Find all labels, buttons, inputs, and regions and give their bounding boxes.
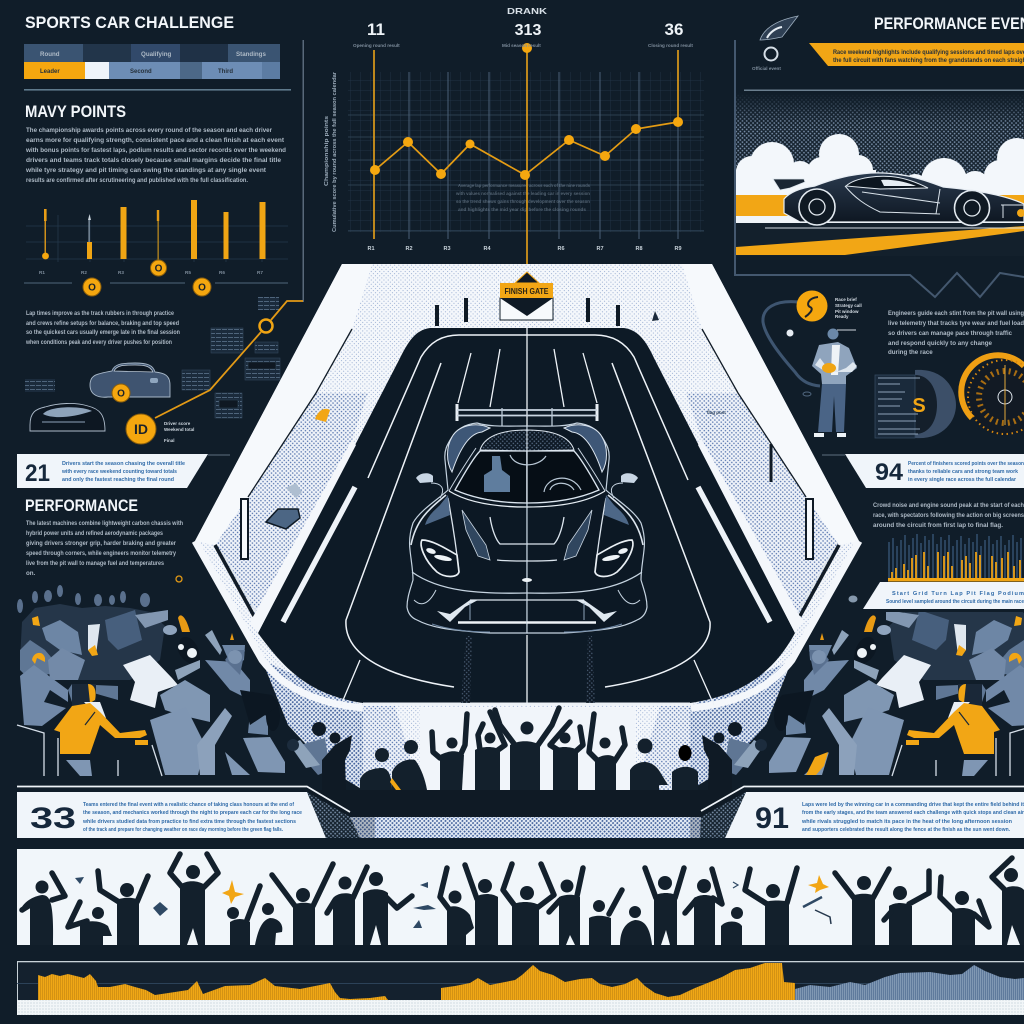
halftone strip under center [325,817,735,838]
value labels: 11 [367,20,385,39]
callout: 33: of the track and prepare for changing weather on race day morning before the green flag falls. [83,827,283,833]
curve line [763,302,820,386]
wheels [799,189,990,226]
car body [784,173,1024,222]
bar chart: points per round: R3 [118,270,124,275]
chart heading: DRANK [507,6,548,16]
icon: rear car: O [117,388,125,400]
text block: second paragraph: when conditions peak and every driver pushes for position [25,339,172,346]
bar chart: points per round: R2 [81,270,87,275]
badge note [835,297,862,319]
mid row spectators [20,650,285,775]
callout: 33: 33 [30,802,76,835]
standings table [24,44,280,79]
orange waveform [38,974,388,1000]
panel: engineer area [763,290,1024,438]
hood vents [462,510,490,560]
car right half [527,404,647,633]
mirror [416,473,433,483]
seats [17,725,162,776]
small badge text: Driver score [164,421,191,426]
main car: front view [407,404,647,633]
figure: engineer [812,328,857,437]
rotated axis text: Championship points [324,116,330,186]
blue waveform [795,965,1024,1000]
icon: data wheel: S [912,395,926,417]
text block: performance: speed through corners, while engineers monitor telemetry [26,550,176,557]
track edge highlight [250,440,803,633]
chart note: so the trend shows gains through development over the season [456,199,590,204]
text block: engineer: and respond quickly to any change [888,340,993,347]
chart: line chart [348,6,704,270]
cheering silhouettes [20,854,1024,945]
bar chart: points per round: R5 [185,270,191,275]
callout: 91 [700,786,1024,838]
chart caption [863,582,1024,609]
confetti [75,875,831,928]
icon: yellow badge: ID [134,421,148,437]
callout: 33: the season, and mechanics worked through the night to prepare each car for the long race [83,810,302,816]
steering wheel [510,455,581,492]
stanchions [241,444,813,559]
rotated axis text: Cumulative score by round across the full season calendar [332,72,338,232]
chart note: and highlights the mid year dip before the closing rounds [458,207,586,212]
heading: performance: PERFORMANCE [25,497,138,515]
callout: 94: in every single race across the full calendar [908,477,1017,483]
white border band [195,264,859,545]
text block: right lower: around the circuit from first lap to final flag. [873,522,1003,529]
bar chart: points per round: R7 [257,270,263,275]
text block: performance: The latest machines combine lightweight carbon chassis with [26,520,183,527]
lower lip [412,572,527,593]
callout: 91: 91 [755,802,789,835]
text block: second paragraph: so the quickest cars usually emerge late in the final session [26,329,180,336]
text block: performance: live from the pit wall to manage fuel and temperatures [26,560,164,567]
text block: engineer [888,310,1024,356]
small badge text [164,421,194,443]
track apron [195,264,859,790]
headlight [421,540,459,576]
chart note: with values normalised against the leading car in every session [455,191,590,196]
axis labels [367,246,682,252]
callout: 94 [822,454,1024,488]
start gate sign: FINISH GATE [504,287,549,296]
text block: performance: hybrid power units and refined aerodynamic packages [26,530,163,537]
bar chart: points per round: R1 [39,270,45,275]
callout: 33: Teams entered the final event with a realistic chance of taking class honours at the end of [83,802,294,808]
chart: line chart: Opening round result [353,43,400,48]
left crowd [17,585,352,790]
dotted base [17,1000,1024,1015]
text block: points: while tyre strategy and pit timing can swing the standings at any single event [25,167,266,174]
text block: engineer: so drivers can manage pace through traffic [888,330,1013,337]
text block: second paragraph [25,310,180,346]
icon: orange gauge [961,355,1024,435]
axis labels: R7 [596,246,604,252]
standings table: Standings [236,51,266,58]
rear wing [456,404,458,421]
callout: 91: while rivals struggled to match its pace in the heat of the long afternoon session [801,819,1013,825]
track side details: flag post [707,410,726,415]
callout: 94: 94 [875,459,904,486]
icon: orange badge [796,290,828,322]
title: SPORTS CAR CHALLENGE [25,14,234,32]
waveform strip [17,961,1024,1015]
callout line with ring [155,301,303,418]
start gate sign [500,272,553,320]
small badge text: Weekend total [164,427,194,432]
roof [480,430,527,451]
standings table: Leader [40,69,60,75]
bar chart: points per round: O [88,282,96,294]
logo [752,16,798,71]
wheel arch highlight [411,495,446,545]
badge note: Ready [835,314,849,319]
axis labels: R2 [405,246,413,252]
icon: rear car [90,363,170,402]
orange banner [809,43,1024,66]
apron marker posts [435,298,620,326]
right crowd [702,612,1024,780]
bar chart: points per round: O [155,264,163,274]
white shirt spectator [123,655,178,708]
axis labels: R8 [635,246,643,252]
axis labels: R3 [443,246,451,252]
value labels: 313 [515,22,541,39]
track grip marks [461,636,595,703]
chart note [455,183,590,212]
rear rows [17,585,245,680]
text block: second paragraph: Lap times improve as the track rubbers in through practice [26,310,174,317]
track side details [266,311,726,529]
orange accent on right crowd [806,752,828,775]
text block: second paragraph: and crews refine setups for balance, braking and top speed [26,320,179,327]
text block: performance [26,520,183,582]
chart: line chart: Closing round result [648,43,693,48]
callout: 21: and only the fastest reaching the final round [62,477,175,483]
text block: engineer: during the race [888,349,933,356]
orange spectator [54,684,148,776]
logo: Official event [752,66,781,71]
standings table: Second [130,69,152,75]
axis labels: R1 [367,246,375,252]
value labels: 36 [665,20,683,39]
small badge text: Final [164,438,175,443]
shoulder [448,425,490,472]
photo panel: side view car [736,93,1024,256]
heading: many points: MAVY POINTS [25,103,126,121]
windshield [455,451,527,503]
standings table: Round [40,51,60,58]
callout: 21: with every race weekend counting toward totals [61,469,177,475]
value labels [367,20,683,39]
text block: points [25,127,286,184]
chart: line chart: Mid season result [502,43,541,48]
chart: spectrum bars: Start Grid Turn Lap Pit Flag Podium [892,591,1024,597]
badge note: Pit window [835,309,859,314]
axis labels: R4 [483,246,491,252]
icon: data wheel [875,370,956,438]
axis labels: R6 [557,246,565,252]
text block: points: The championship awards points across every round of the season and each driver [26,127,273,134]
callout: 94: thanks to reliable cars and strong team work [908,469,1019,475]
small data notes [25,297,280,418]
text block: performance: giving drivers stronger grip, harder braking and greater [26,540,177,547]
chart note: Average lap performance measured across each of the nine rounds [458,183,590,188]
car left half [407,404,527,633]
standings table: Third [218,69,233,75]
center crowd silhouettes [360,708,698,790]
text block: right lower [873,502,1024,529]
bar chart: points per round [24,200,288,296]
driver [484,456,510,492]
lower dark band [300,790,750,817]
text block: points: results are confirmed after scrutineering and published with the full classification. [26,177,248,184]
track surface [258,328,795,703]
panel: performance event [735,15,1024,297]
callout: 33 [17,786,360,838]
callout: 21: 21 [25,460,50,487]
rotated axis text [324,72,338,232]
callout: 21 [17,454,230,488]
text block: points: with bonus points for fastest laps, podium results and sector records over the weekend [25,147,286,154]
icon: yellow badge [126,414,156,444]
badge note: Strategy call [835,303,862,308]
icon: front car [30,403,105,431]
crowd band [17,849,1024,945]
text block: points: earns more for qualifying strength, consistent pace and a clean finish at each event [26,137,284,144]
nose badge [522,578,532,582]
axis labels: R9 [674,246,682,252]
orange accent on crowd [390,778,401,790]
track lane markings [283,328,770,705]
panel: title and points table [24,14,280,79]
foreground heads on halftone [287,722,352,790]
chart: spectrum bars [863,534,1024,609]
bar chart: points per round: O [198,282,206,294]
text block: performance: on. [26,570,36,577]
bar chart: points per round: R6 [219,270,225,275]
badge note: Race brief [835,297,857,302]
callout: 21: Drivers start the season chasing the overall title [62,461,185,467]
text block: points: drivers and teams track totals closely because small margins decide the final title [26,157,282,164]
standings table: Qualifying [141,51,171,58]
callout: 33: while drivers studied data from practice to find extra time through the fastest sections [82,819,296,825]
